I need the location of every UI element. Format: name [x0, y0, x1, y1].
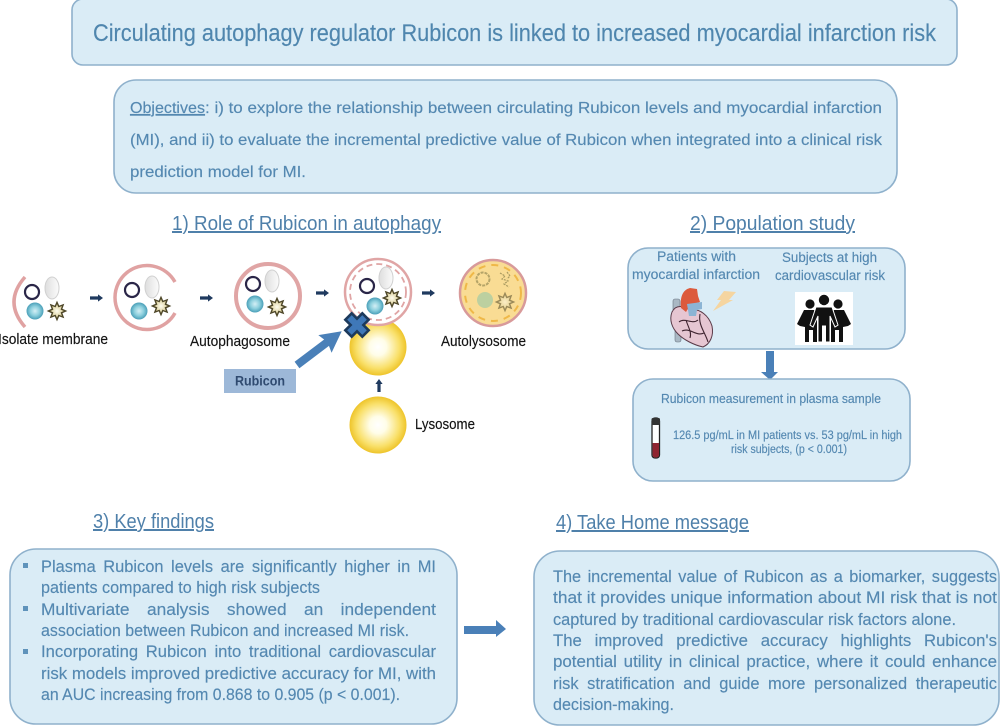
stage: autophagosome	[236, 264, 300, 328]
panel: take home message: risk stratification and guide more personalized therapeutic	[553, 675, 997, 693]
heading: key findings: 3) Key findings	[93, 511, 214, 533]
panel: take home message: captured by traditional cardiovascular risk factors alone.	[553, 611, 956, 629]
findings text: Plasma Rubicon levels are significantly higher in MI	[41, 558, 436, 576]
diagram: autophagy pathway	[0, 259, 526, 454]
panel: take home message: decision-making.	[553, 696, 674, 714]
findings text: Multivariate analysis showed an independent	[41, 601, 436, 619]
panel: objectives: : i) to explore the relationship between circulating Rubicon levels and myocardial infarction	[205, 100, 882, 117]
panel: study groups: Subjects at high	[782, 250, 877, 265]
panel: take home message: that it provides unique information about MI risk that is not	[553, 589, 997, 607]
panel: plasma measurement: Rubicon measurement in plasma sample	[661, 392, 881, 406]
icon: heart	[671, 288, 713, 347]
icon: blocking cross	[340, 308, 374, 342]
heading: take home: 4) Take Home message	[556, 512, 749, 534]
panel: objectives: (MI), and ii) to evaluate the incremental predictive value of Rubicon when integrated into a clinical risk	[130, 132, 883, 149]
arrow: groups to measurement	[761, 351, 778, 380]
title banner: Circulating autophagy regulator Rubicon is linked to increased myocardial infarction risk	[93, 20, 937, 47]
label: Rubicon: Rubicon	[235, 374, 285, 388]
panel: take home message: The incremental value of Rubicon as a biomarker, suggests	[553, 568, 997, 586]
label: autophagosome: Autophagosome	[190, 334, 290, 350]
findings text: association between Rubicon and increased MI risk.	[41, 622, 409, 640]
stage: closing membrane	[115, 266, 175, 330]
panel: plasma measurement	[633, 379, 910, 481]
lysosome fused	[350, 318, 406, 376]
arrow: step 3	[316, 289, 329, 297]
bullets	[23, 563, 28, 654]
arrow: step 4	[422, 289, 435, 297]
panel: study groups: myocardial infarction	[632, 267, 760, 282]
arrow: findings to message	[464, 620, 506, 637]
panel: plasma measurement: 126.5 pg/mL in MI patients vs. 53 pg/mL in high	[673, 430, 902, 442]
panel: key findings	[10, 549, 457, 724]
label: isolate membrane: Isolate membrane	[0, 332, 108, 348]
heading: role of Rubicon: 1) Role of Rubicon in autophagy	[172, 213, 441, 235]
findings text	[41, 558, 437, 704]
arrow: Rubicon inhibition	[290, 323, 348, 374]
panel: objectives: Objectives	[130, 100, 205, 117]
findings text: Incorporating Rubicon into traditional cardiovascular	[41, 643, 437, 661]
panel: study groups: Patients with	[657, 249, 736, 264]
panel: study groups	[628, 248, 905, 349]
findings text: an AUC increasing from 0.868 to 0.905 (p < 0.001).	[41, 686, 400, 704]
panel: take home message	[534, 551, 999, 725]
findings text: patients compared to high risk subjects	[41, 579, 320, 597]
panel: objectives: prediction model for MI.	[130, 164, 306, 181]
title banner	[72, 0, 957, 65]
arrow: lysosome upward	[375, 379, 383, 392]
label: Rubicon	[224, 369, 296, 393]
arrow: step 2	[200, 294, 213, 302]
label: lysosome: Lysosome	[415, 417, 475, 433]
panel: take home message: The improved predictive accuracy highlights Rubicon's	[553, 632, 997, 650]
arrow: step 1	[90, 294, 103, 302]
stage: isolate membrane	[14, 277, 66, 327]
panel: plasma measurement: risk subjects, (p < 0.001)	[731, 444, 847, 456]
stage: autolysosome	[460, 260, 526, 326]
icon: people	[795, 292, 853, 345]
panel: take home message: potential utility in clinical practice, where it could enhance	[553, 653, 997, 671]
panel: study groups: cardiovascular risk	[775, 268, 885, 283]
lysosome	[350, 396, 406, 454]
panel: objectives	[114, 80, 897, 193]
stage: blocked fusion vesicle	[345, 259, 411, 325]
icon: blood tube	[652, 418, 660, 458]
label: autolysosome: Autolysosome	[441, 334, 526, 350]
icon: lightning bolt	[713, 291, 736, 311]
heading: population study: 2) Population study	[690, 213, 855, 235]
findings text: risk models improved predictive accuracy for MI, with	[41, 665, 436, 683]
